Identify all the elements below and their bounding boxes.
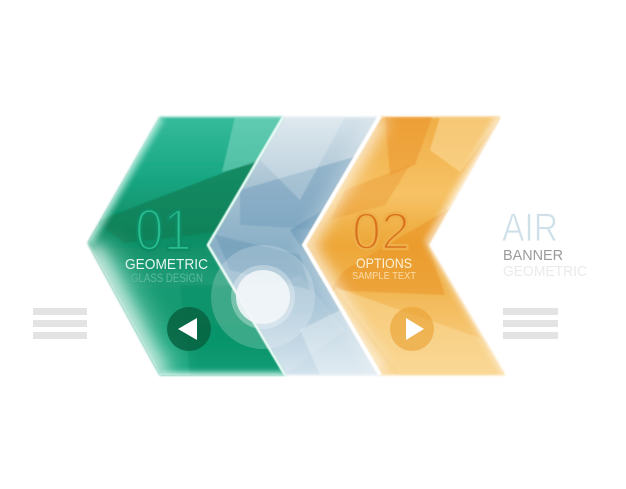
text: air banner geometric: BANNER bbox=[503, 247, 563, 264]
text: air banner geometric: GEOMETRIC bbox=[503, 263, 587, 280]
text: 02 block bbox=[352, 203, 416, 282]
text: air banner geometric: AIR bbox=[502, 206, 558, 250]
icon: left menu bars bbox=[33, 308, 87, 339]
text: air banner geometric bbox=[502, 206, 587, 280]
text: 02 block: 02 bbox=[352, 203, 410, 261]
panel: orange glass chevron bbox=[304, 116, 505, 375]
big glass circle bbox=[211, 245, 315, 349]
text: 02 block: OPTIONS bbox=[356, 255, 412, 271]
text: 01 block: 01 bbox=[135, 198, 192, 263]
icon: right menu bars bbox=[503, 308, 558, 339]
text: 02 block: SAMPLE TEXT bbox=[352, 271, 416, 282]
text: 01 block: GEOMETRIC bbox=[125, 256, 208, 273]
icon: right arrow button bbox=[390, 307, 434, 351]
text: 01 block: GLASS DESIGN bbox=[131, 271, 203, 285]
icon: left arrow button bbox=[167, 307, 211, 351]
panel: blue glass chevron bbox=[208, 117, 380, 375]
panel: green glass chevron bbox=[88, 117, 285, 380]
text: 01 block bbox=[125, 198, 208, 285]
